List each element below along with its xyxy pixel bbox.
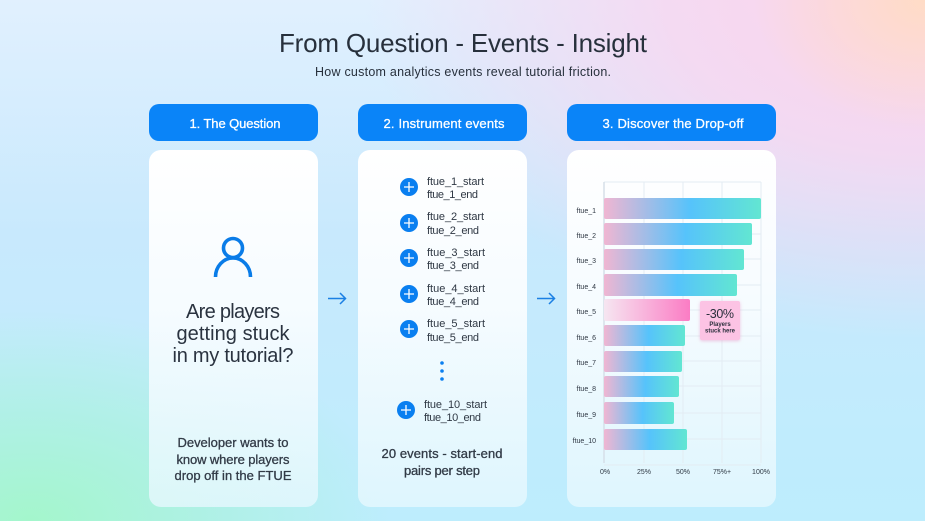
event pair 3 [400,247,485,272]
events summary: pairs per step [404,463,480,478]
header: discover the drop-off: 3. Discover the Drop-off [602,116,744,131]
event pair 5 [400,318,485,344]
callout: players stuck here: -30% [706,307,734,321]
row labels: ftue_10 [573,438,596,445]
row labels: ftue_6 [577,335,596,342]
card: instrument events [358,150,527,507]
event pair 2: ftue_2_start [427,211,484,223]
ellipsis dots [440,361,444,381]
question text [172,301,294,367]
developer note: drop off in the FTUE [174,468,292,483]
event pair 2: ftue_2_end [427,225,479,237]
event pair 3: ftue_3_start [427,247,485,259]
header: instrument events: 2. Instrument events [384,116,505,131]
event pair 10: ftue_10_start [424,399,487,411]
row labels: ftue_4 [577,284,596,291]
axis labels: 75%+ [713,469,731,476]
row labels: ftue_8 [577,386,596,393]
axis labels: 100% [752,469,770,476]
panel: the question [149,104,318,507]
panel: instrument events [358,104,527,507]
event pair 1 [400,176,484,201]
developer note [174,435,292,483]
title: From Question - Events - Insight [279,28,648,58]
icon: user [216,238,250,277]
axis labels: 50% [676,469,690,476]
row labels: ftue_7 [577,360,596,367]
axis labels [600,469,770,476]
developer note: Developer wants to [178,435,288,450]
event pair 10: ftue_10_end [424,412,481,424]
card: the question [149,150,318,507]
header: instrument events [358,104,527,141]
event pair 5: ftue_5_end [427,332,479,344]
header: discover the drop-off [567,104,776,141]
arrow: events to drop-off [537,293,554,304]
arrow: question to events [328,293,346,304]
events summary: 20 events - start-end [382,446,502,461]
callout: players stuck here [700,301,740,340]
header: the question: 1. The Question [190,116,280,131]
row labels: ftue_2 [577,233,596,240]
axis labels: 0% [600,469,610,476]
event pair 2 [400,211,484,237]
panel: discover the drop-off [567,104,776,507]
event pair 3: ftue_3_end [427,260,479,272]
axis labels: 25% [637,469,651,476]
row labels: ftue_9 [577,412,596,419]
developer note: know where players [176,452,290,467]
callout: players stuck here: Players [709,322,731,328]
event pair 1: ftue_1_start [427,176,484,188]
callout: players stuck here: stuck here [705,328,736,334]
event pair 4 [400,283,485,308]
question text: Are players [186,301,280,323]
event pair 10 [397,399,487,424]
event pair 4: ftue_4_end [427,296,479,308]
events summary [382,446,502,478]
subtitle: How custom analytics events reveal tutorial friction. [315,65,611,79]
bars [604,198,761,450]
question text: in my tutorial? [172,345,294,367]
header: the question [149,104,318,141]
row labels: ftue_1 [577,208,596,215]
card: discover the drop-off [567,150,776,507]
event pair 1: ftue_1_end [427,189,478,201]
bar chart [573,182,770,476]
event pair 4: ftue_4_start [427,283,485,295]
question text: getting stuck [176,323,290,345]
event pair 5: ftue_5_start [427,318,485,330]
row labels: ftue_5 [577,309,596,316]
row labels [573,208,596,445]
row labels: ftue_3 [577,258,596,265]
